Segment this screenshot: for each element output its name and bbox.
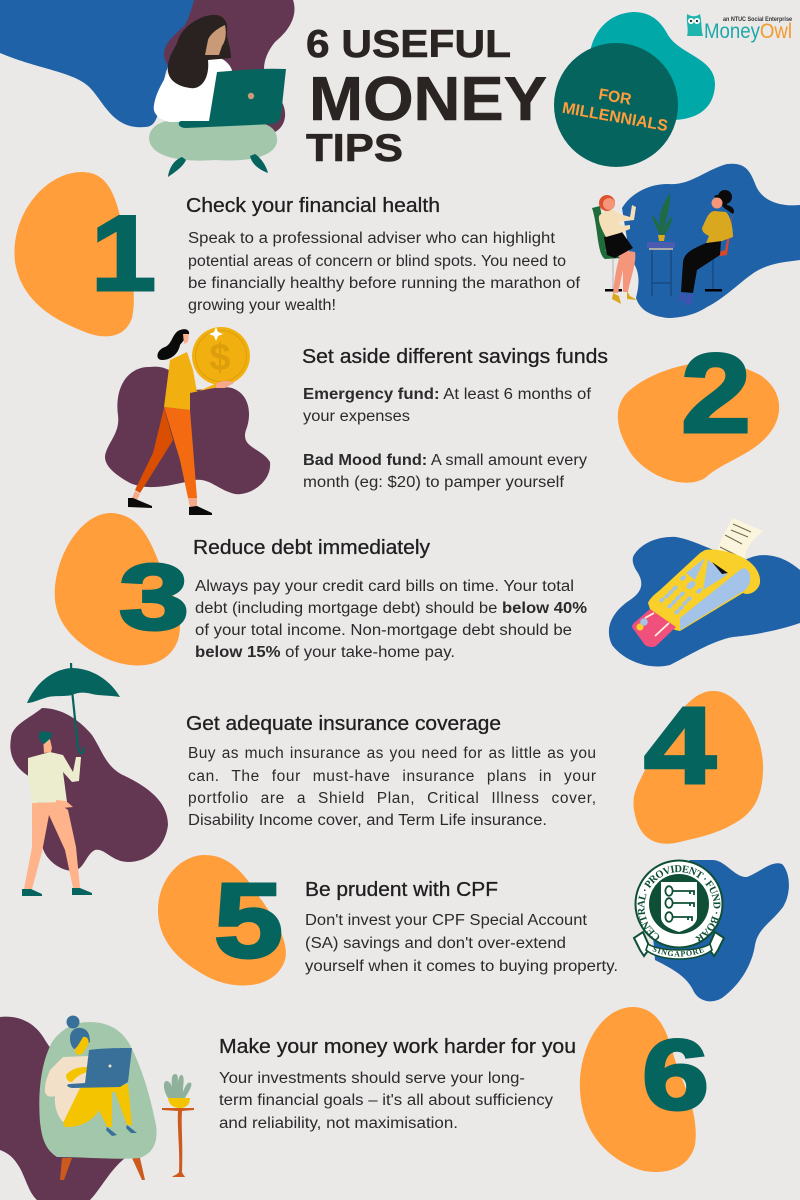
body text: can. The four must-have insurance plans in your [188,768,596,785]
ribbon: SINGAPORE [652,948,704,956]
icon: gold coin: $ [209,337,231,379]
orange blob [618,363,779,483]
number 3: 3 [119,545,189,649]
body text: Speak to a professional adviser who can highlight [188,230,556,247]
icon: owl [687,14,703,36]
left woman [592,195,637,304]
heading: Set aside different savings funds [302,346,608,368]
body text [188,745,596,829]
badge: for millennials: FOR [597,86,633,109]
orange blob [158,855,286,985]
number 5: 5 [214,862,283,980]
panel: tip 2 [105,327,779,515]
right woman [677,190,734,305]
body text: yourself when it comes to buying property. [305,958,618,975]
orange blob [580,1007,696,1172]
woman [45,1056,89,1125]
illustration: potted plant on table [162,1074,194,1177]
shield with keys [661,882,697,932]
body text: below 15% of your take-home pay. [195,644,455,661]
terminal body [648,549,760,631]
body text: Disability Income cover, and Term Life insurance. [188,812,547,829]
woman sitting [149,15,286,177]
body text: Bad Mood fund: A small amount every [303,452,587,469]
body text [305,912,618,975]
armchair [39,1022,157,1159]
body text: debt (including mortgage debt) should be below 40% [195,600,587,617]
body text: of your total income. Non-mortgage debt should be [195,622,572,639]
illustration: woman on armchair [0,1016,157,1200]
body text [195,578,587,661]
illustration: adviser meeting [592,164,800,318]
title: MONEY [309,65,547,134]
body text [188,230,581,314]
orange blob [55,513,180,665]
illustration: man with umbrella [10,663,168,896]
number 4: 4 [644,685,716,807]
chair legs [60,1158,145,1180]
orange blob [15,172,134,336]
laptop [67,1048,132,1088]
receipt [717,518,763,567]
woman [135,408,173,493]
body text: your expenses [303,408,410,425]
purple blob [10,708,168,871]
heading: Be prudent with CPF [305,879,498,901]
logo: MoneyOwl [687,14,792,43]
icon: gold coin [192,327,250,385]
panel: tip 6 [0,1007,709,1200]
panel: tip 4 [10,663,763,896]
title: TIPS [306,127,403,170]
man [24,802,80,889]
panel: tip 1 [15,164,800,336]
title: 6 USEFUL [306,23,511,66]
blue blob [650,860,789,1001]
purple blob [164,0,294,132]
body text: and reliability, not maximisation. [219,1115,458,1132]
heading: Check your financial health [186,195,440,217]
crest ring text: CENTRAL · PROVIDENT · FUND · BOARD [638,865,720,942]
umbrella [27,663,120,753]
purple blob [105,367,270,494]
ribbon [632,930,726,960]
body text: portfolio are a Shield Plan, Critical Illness cover, [188,790,596,807]
purple blob [0,1017,125,1200]
body text: Emergency fund: At least 6 months of [303,386,592,403]
logo: MoneyOwl: MoneyOwl [704,20,792,43]
plant on side table [647,193,675,296]
body text [303,386,592,491]
body text [219,1070,553,1132]
body text: Buy as much insurance as you need for as little as you [188,745,596,762]
logo: CPF Board crest [632,860,726,960]
body text: potential areas of concern or blind spots. You need to [188,253,566,270]
title [306,23,547,170]
number 1: 1 [91,193,156,313]
badge: for millennials: MILLENNIALS [561,100,669,135]
heading: Reduce debt immediately [193,537,430,559]
illustration: card payment terminal [609,518,800,666]
panel: header illustration, woman with laptop [0,0,294,177]
body text: Always pay your credit card bills on time. Your total [195,578,574,595]
number 2: 2 [681,331,751,456]
body text: be financially healthy before running the marathon of [188,275,581,292]
body text: term financial goals – it's all about sufficiency [219,1092,553,1109]
body text: Don't invest your CPF Special Account [305,912,588,929]
keypad [658,574,703,615]
blue blob [0,0,195,127]
credit card [632,609,676,647]
body text: Your investments should serve your long- [219,1070,525,1087]
orange blob [633,691,763,844]
body text: month (eg: $20) to pamper yourself [303,474,565,491]
panel: tip 3 [55,513,800,666]
illustration: woman carrying coin [105,327,270,515]
body text: growing your wealth! [188,297,336,314]
heading: Make your money work harder for you [219,1036,576,1058]
body text: (SA) savings and don't over-extend [305,935,566,952]
badge: for millennials [554,12,715,167]
heading: Get adequate insurance coverage [186,713,501,735]
number 6: 6 [642,1019,709,1130]
